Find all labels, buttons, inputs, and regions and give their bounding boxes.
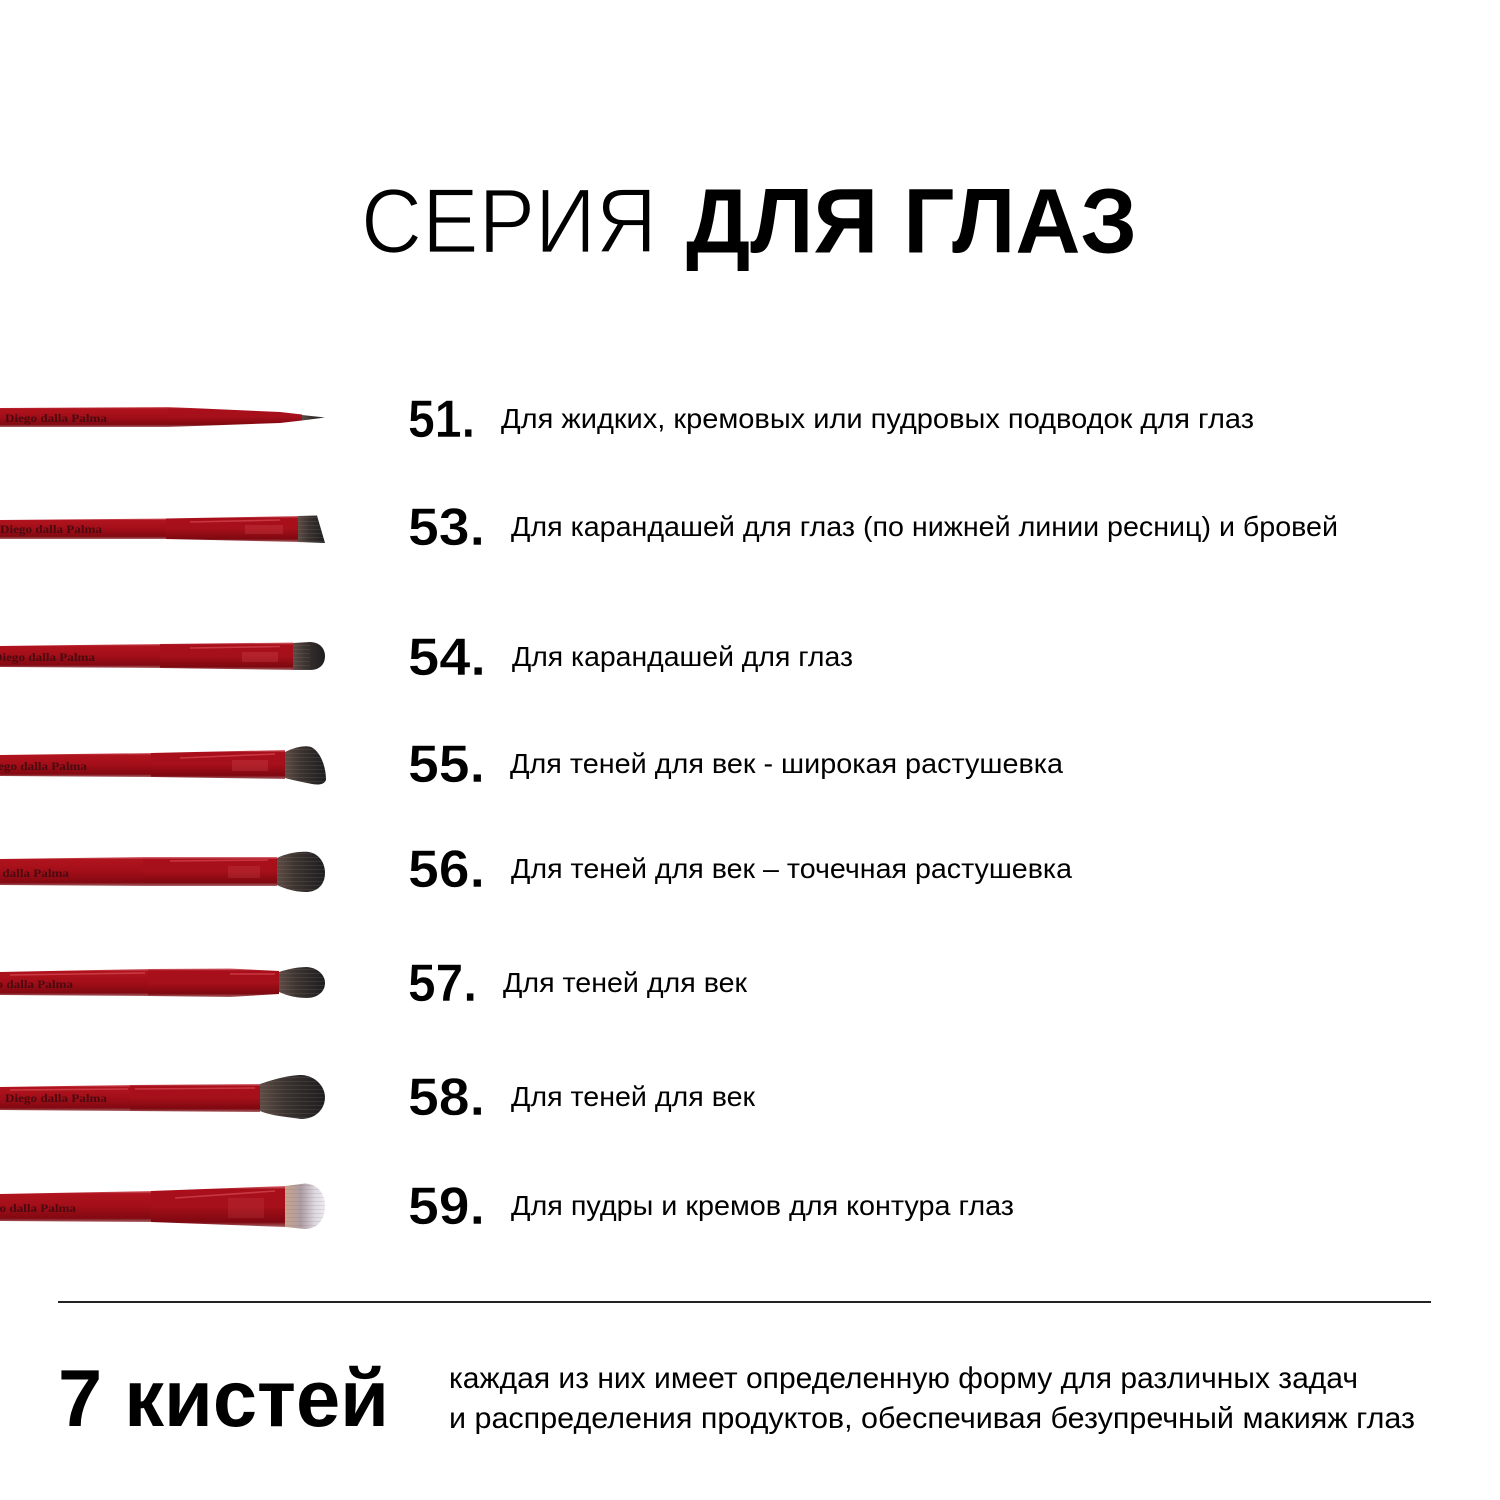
number 57: 57. (408, 954, 477, 1013)
brush 53: Diego dalla Palma (0, 524, 102, 536)
summary text: и распределения продуктов, обеспечивая безупречный макияж глаз (449, 1402, 1415, 1435)
description 53: Для карандашей для глаз (по нижней линии ресниц) и бровей (511, 511, 1338, 542)
number 54: 54. (408, 628, 486, 687)
description 59: Для пудры и кремов для контура глаз (511, 1190, 1014, 1221)
brush 56 (0, 852, 325, 892)
brush 59 (0, 1184, 325, 1229)
number 56: 56. (408, 840, 485, 899)
number 55: 55. (408, 735, 485, 794)
brush 57 (0, 967, 325, 998)
brush 55 (0, 746, 326, 785)
brush 51 (0, 407, 325, 427)
brush 54 (0, 642, 325, 670)
summary heading: 7 кистей (58, 1354, 389, 1444)
title: СЕРИЯ (361, 170, 657, 272)
number 51: 51. (408, 390, 475, 449)
brush 58: Diego dalla Palma (5, 1093, 107, 1105)
brush 53 (0, 516, 325, 543)
title: ДЛЯ ГЛАЗ (686, 170, 1137, 272)
number 59: 59. (408, 1177, 485, 1236)
brush 58 (0, 1075, 325, 1119)
number 58: 58. (408, 1068, 485, 1127)
description 56: Для теней для век – точечная растушевка (511, 853, 1072, 884)
description 51: Для жидких, кремовых или пудровых подводок для глаз (501, 403, 1254, 434)
description 54: Для карандашей для глаз (512, 641, 853, 672)
description 58: Для теней для век (511, 1081, 756, 1112)
brush 51: Diego dalla Palma (5, 413, 107, 425)
number 53: 53. (408, 498, 485, 557)
description 55: Для теней для век - широкая растушевка (510, 748, 1063, 779)
summary text (449, 1362, 1415, 1435)
title (361, 170, 1137, 272)
summary text: каждая из них имеет определенную форму для различных задач (449, 1362, 1358, 1395)
description 57: Для теней для век (503, 967, 748, 998)
